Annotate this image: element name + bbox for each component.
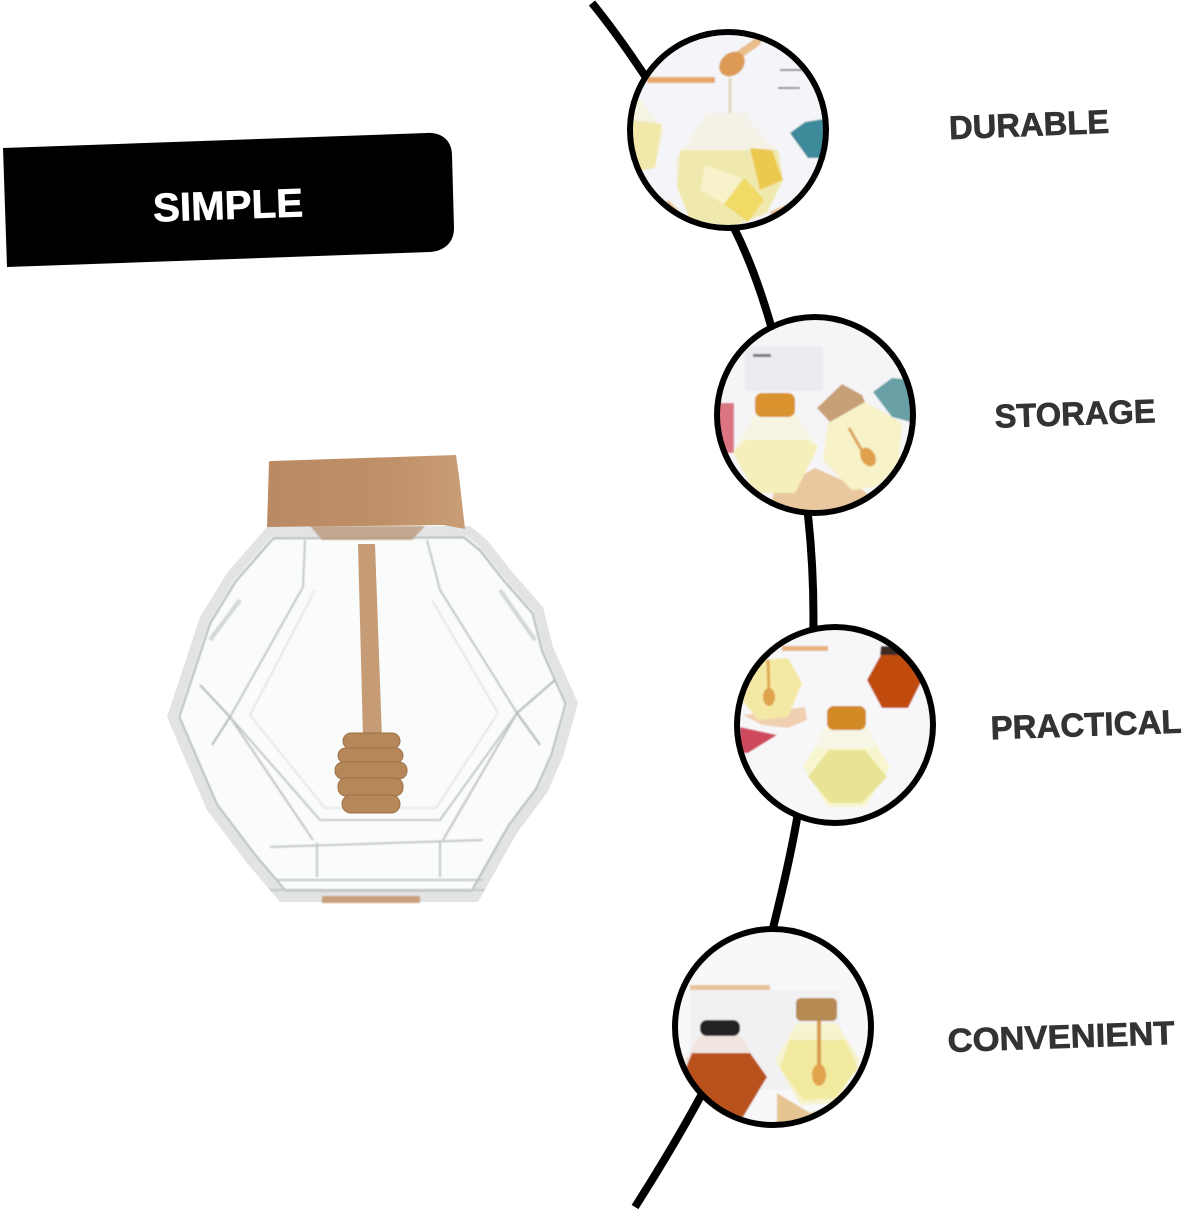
feature photo: DURABLE — [628, 30, 830, 232]
product photo: glass honey jar — [167, 455, 578, 903]
jar glass body — [167, 526, 578, 903]
dipper and honey drip — [740, 42, 757, 54]
left jar — [732, 413, 816, 452]
feature label: DURABLE: DURABLE — [948, 103, 1110, 146]
main jar — [803, 727, 890, 807]
dipper head — [335, 733, 407, 813]
feature label: STORAGE: STORAGE — [994, 392, 1156, 435]
wood board — [771, 468, 868, 510]
wood coaster and checked cloth — [743, 707, 807, 728]
main jar — [675, 112, 781, 181]
feature label: PRACTICAL: PRACTICAL — [990, 703, 1182, 746]
feature label: CONVENIENT: CONVENIENT — [947, 1014, 1175, 1059]
feature photo: PRACTICAL — [735, 625, 935, 825]
right jar — [823, 400, 902, 490]
teal plate — [873, 378, 915, 423]
jar neck collar — [310, 526, 425, 540]
banner: SIMPLE — [3, 133, 454, 267]
feature photo: CONVENIENT — [673, 927, 873, 1127]
amber jar — [684, 1034, 760, 1067]
feature photo: STORAGE — [715, 315, 915, 520]
teal plate — [790, 118, 823, 159]
connecting curved line — [592, 3, 814, 1207]
jar on the left — [634, 100, 664, 158]
wooden dipper stick — [358, 544, 382, 738]
wooden block — [776, 1092, 823, 1122]
wooden lid — [267, 455, 465, 529]
honey jar — [775, 1023, 860, 1105]
banner label: SIMPLE — [152, 181, 304, 231]
jar top left — [742, 658, 802, 720]
amber jar — [867, 653, 922, 708]
